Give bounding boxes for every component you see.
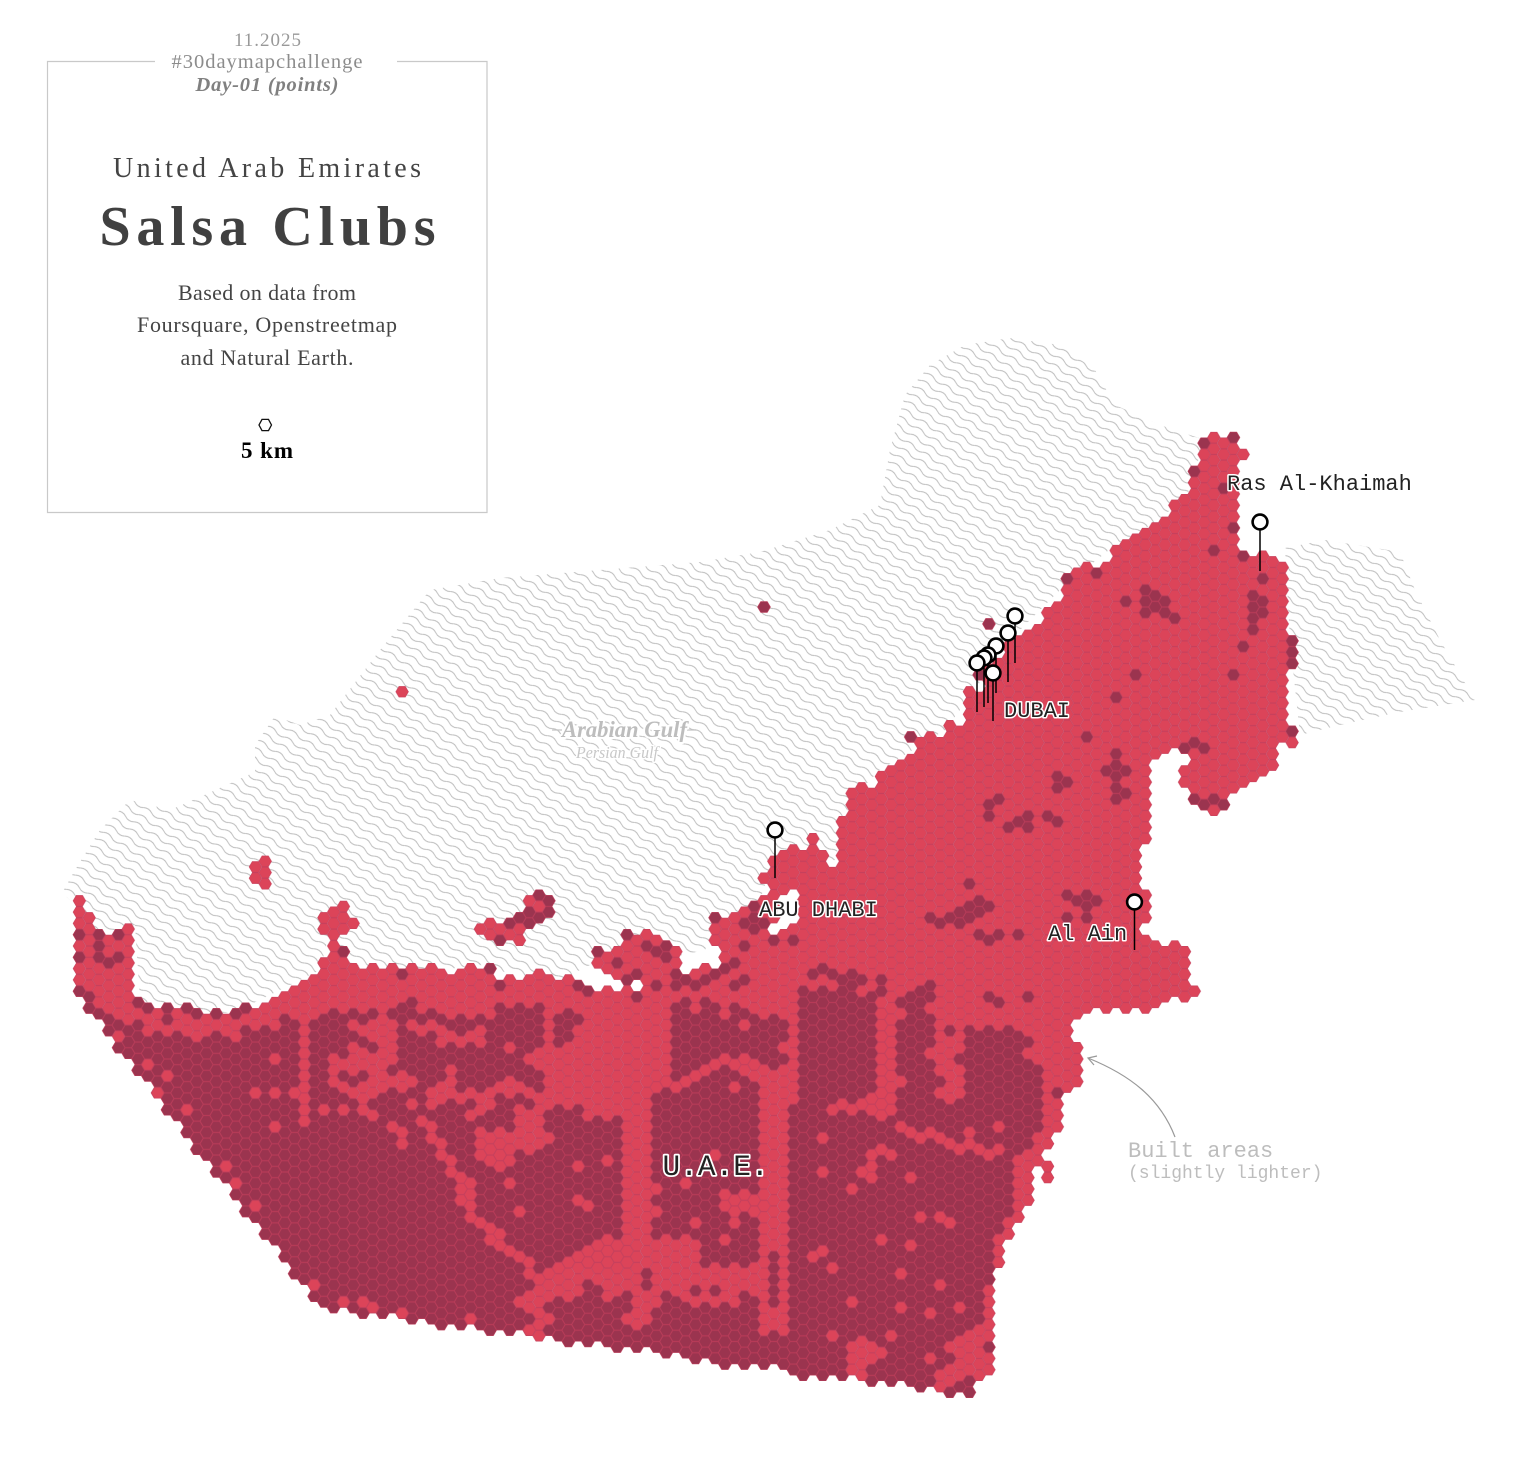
- scale hexagon icon: [259, 419, 272, 431]
- challenge hashtag: #30daymapchallenge: [172, 51, 362, 73]
- subtitle: United Arab Emirates: [113, 153, 421, 184]
- pins: Dubai cluster: [970, 609, 1022, 721]
- callout: built areas: Built areas: [1128, 1139, 1273, 1164]
- land hexagons: odd rows: [89, 443, 1282, 1392]
- date line: 11.2025: [234, 30, 301, 51]
- pin: Ras Al-Khaimah: [1253, 515, 1267, 571]
- sea texture: Arabian Gulf: [62, 338, 1205, 1015]
- pin stems: [977, 616, 1015, 721]
- source text: Based on data from: [178, 280, 356, 305]
- built-area hexagons: odd rows: [148, 1065, 989, 1325]
- map: hexagon grid of the U.A.E.: [79, 438, 1292, 1392]
- Arabian Gulf dashes: [552, 729, 696, 731]
- dark hexagons: odd rows: [89, 443, 1263, 1392]
- label: U.A.E.: U.A.E.: [662, 1150, 769, 1184]
- pin: Al Ain: [1127, 895, 1142, 950]
- source text: and Natural Earth.: [180, 345, 354, 370]
- built-area hexagons: even rows: [158, 1014, 999, 1330]
- main title: Salsa Clubs: [100, 196, 436, 258]
- label: Dubai: DUBAI: [1004, 699, 1070, 724]
- source text: Foursquare, Openstreetmap: [137, 312, 397, 337]
- day theme: Day-01 (points): [194, 74, 338, 96]
- callout: built areas: (slightly lighter): [1128, 1164, 1322, 1184]
- land hexagons: even rows: [79, 438, 1292, 1387]
- callout: built areas: [1128, 1139, 1322, 1184]
- panel frame: [48, 62, 487, 512]
- pin heads: [970, 609, 1022, 680]
- pin: Abu Dhabi: [768, 823, 782, 878]
- label: Ras Al-Khaimah: Ras Al-Khaimah: [1227, 472, 1412, 497]
- label: Abu Dhabi: ABU DHABI: [759, 898, 878, 923]
- dark hexagons: even rows: [79, 438, 1292, 1387]
- sea texture: Gulf of Oman: [1285, 540, 1475, 735]
- source text: [137, 280, 397, 370]
- scale label: 5 km: [241, 438, 293, 463]
- callout arrow: built areas: [1088, 1056, 1175, 1137]
- Arabian Gulf text: Arabian Gulf: [560, 717, 689, 742]
- annotation: Persian Gulf: Persian Gulf: [575, 743, 660, 762]
- panel: title box: [48, 30, 487, 512]
- label: Al Ain: Al Ain: [1048, 922, 1127, 947]
